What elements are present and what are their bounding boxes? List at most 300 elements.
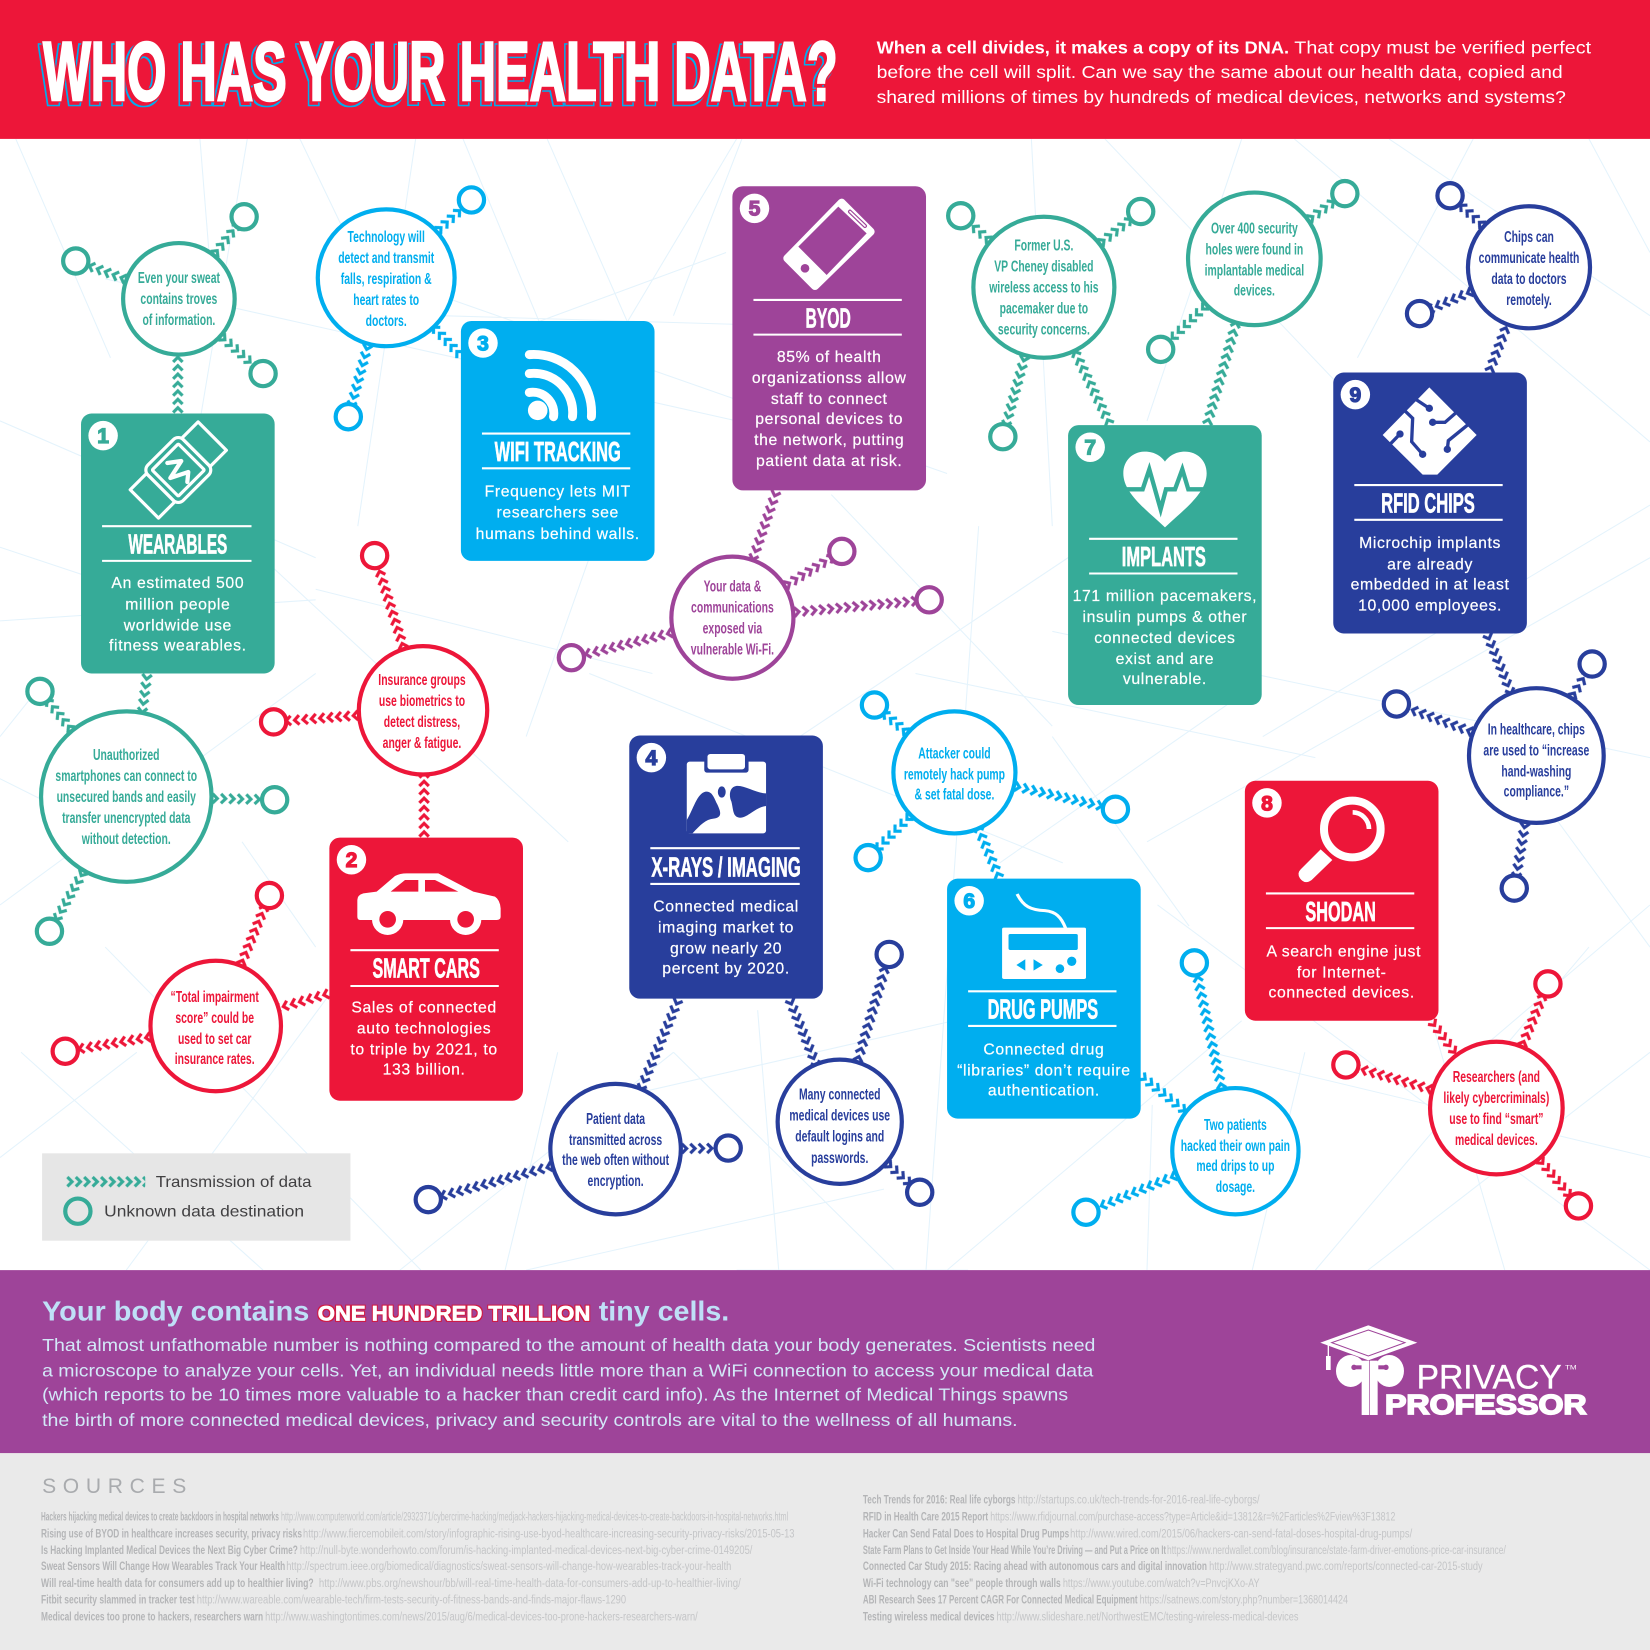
arrow: [582, 626, 675, 661]
cluster: chips callout: [1407, 183, 1590, 375]
arrow: card to callout: [783, 996, 822, 1067]
number 3: 3: [477, 332, 489, 355]
icon: drug pump: [1002, 894, 1086, 979]
callout text: [789, 1085, 890, 1166]
callout text: security concerns.: [998, 320, 1090, 338]
arrow: [1191, 974, 1228, 1091]
node: [1182, 950, 1207, 975]
arrow: [1534, 1155, 1575, 1200]
sources right column: Testing wireless medical devices: [863, 1612, 994, 1624]
callout text: data to doctors: [1491, 270, 1567, 288]
headline: [42, 1296, 729, 1327]
callout text: medical devices.: [1455, 1131, 1538, 1148]
node: [257, 883, 282, 908]
arrow: [209, 223, 241, 259]
node: [1384, 691, 1409, 717]
heading: BYOD: [806, 302, 851, 333]
arrow: card to callout: [418, 774, 430, 838]
sources left column: Medical devices too prone to hackers, researchers warn: [41, 1612, 263, 1624]
callout text: hacked their own pain: [1181, 1137, 1290, 1155]
arrow: [851, 965, 892, 1064]
cluster: default logins callout: [778, 942, 932, 1205]
panel: byod: [732, 186, 926, 490]
callout text: Over 400 security: [1211, 219, 1298, 237]
node: [862, 692, 887, 718]
callout text: VP Cheney disabled: [994, 257, 1094, 275]
headline: tiny cells.: [599, 1296, 729, 1327]
heading: DRUG PUMPS: [988, 994, 1098, 1025]
callout circle: [1172, 1088, 1299, 1214]
arrow: [86, 259, 129, 286]
heading: SMART CARS: [373, 953, 480, 984]
number 9: 9: [1350, 384, 1361, 407]
node: [856, 845, 881, 870]
node: [1566, 1193, 1591, 1219]
node: [948, 203, 973, 228]
callout text: devices.: [1234, 282, 1275, 299]
paragraph: (which reports to be 10 times more valuable to a hacker than credit card info). As the Internet of Medical Things spawns: [42, 1385, 1068, 1405]
callout circle: [318, 209, 455, 346]
arrow: [211, 792, 262, 806]
arrow: [1000, 354, 1031, 426]
callout text: anger & fatigue.: [383, 734, 461, 752]
body text: connected devices.: [1269, 985, 1415, 1002]
arrow: [432, 204, 466, 236]
callout text: smartphones can connect to: [55, 767, 197, 784]
callout text: [562, 1110, 669, 1189]
callout text: [378, 671, 466, 752]
cluster: insurance callout: [261, 543, 487, 838]
node: [1333, 1052, 1359, 1078]
arrow: [1096, 1169, 1179, 1213]
arrow: [346, 342, 374, 406]
node: [917, 587, 942, 612]
cluster: wi-fi exposure callout: [559, 488, 942, 679]
headline: Your body contains: [42, 1296, 309, 1327]
body text: authentication.: [988, 1082, 1100, 1099]
callout text: [1181, 1116, 1290, 1196]
node: [559, 645, 584, 670]
arrow: card to callout: [635, 996, 685, 1091]
node: [907, 1180, 932, 1205]
callout circle: [359, 646, 487, 774]
node: [1332, 181, 1357, 206]
callout circle: [1469, 688, 1604, 823]
arrow: card to callout: [136, 673, 154, 713]
node: [250, 361, 276, 386]
arrow: [1096, 214, 1135, 249]
body text: fitness wearables.: [109, 637, 247, 654]
callout text: passwords.: [811, 1149, 868, 1166]
callout text: “Total impairment: [171, 988, 259, 1005]
icon: smartwatch: [127, 418, 230, 522]
callout text: insurance rates.: [175, 1050, 255, 1067]
sources right column: State Farm Plans to Get Inside Your Head While You’re Driving — and Put a Price on It: [863, 1545, 1166, 1557]
arrow: [880, 709, 912, 738]
node: [336, 404, 361, 429]
node: [1407, 301, 1432, 326]
callout circle: [1188, 193, 1321, 325]
sources right column: http://www.wired.com/2015/06/hackers-can-send-fatal-doses-hospital-drug-pumps/: [1070, 1528, 1413, 1540]
arrow: card to callout: [1069, 348, 1116, 428]
callout text: remotely.: [1506, 291, 1552, 309]
callout text: transmitted across: [569, 1131, 662, 1148]
paragraph: the birth of more connected medical devices, privacy and security controls are vital to the wellness of all humans.: [42, 1410, 1018, 1430]
intro text: [877, 38, 1591, 107]
icon: wifi: [528, 354, 592, 420]
panel: implants: [1068, 425, 1262, 705]
arrow: [681, 1142, 716, 1155]
node: [829, 539, 854, 564]
callout text: implantable medical: [1205, 262, 1304, 279]
callout text: are used to “increase: [1483, 741, 1589, 759]
arrow: [216, 331, 258, 370]
node: [459, 187, 484, 213]
node: [1579, 651, 1605, 677]
arrow: card to callout: [1481, 631, 1517, 695]
arrow: card to callout: [172, 355, 184, 414]
cluster: unauthorized callout: [27, 673, 287, 944]
callout text: used to set car: [178, 1030, 251, 1047]
callout text: Many connected: [799, 1085, 881, 1103]
sources left column: [41, 1512, 794, 1624]
intro text: before the cell will split. Can we say the same about our health data, copied and: [877, 62, 1563, 82]
number 5: 5: [749, 198, 761, 221]
callout text: likely cybercriminals): [1443, 1089, 1549, 1106]
arrow: [1516, 993, 1549, 1049]
sources left column: http://spectrum.ieee.org/biomedical/diagnostics/sweat-sensors-will-change-how-wearables-track-your-health: [286, 1561, 731, 1573]
arrow: card to callout: [747, 488, 783, 562]
callout text: score” could be: [175, 1009, 254, 1026]
node: [261, 709, 286, 735]
arrow: [966, 219, 995, 246]
body text: 85% of health: [777, 349, 882, 366]
callout circle: [671, 557, 793, 679]
callout text: In healthcare, chips: [1488, 720, 1585, 738]
sources left column: http://www.fiercemobileit.com/story/infographic-rising-use-byod-healthcare-increasing-security-privacy-risks/2015-05-13: [303, 1528, 794, 1540]
body text: [752, 349, 907, 470]
sources right column: https://www.rfidjournal.com/purchase-access?type=Article&id=13812&r=%2Farticles%2Fview%3F13812: [990, 1512, 1395, 1524]
body text: A search engine just: [1266, 944, 1421, 961]
arrow: [873, 811, 916, 853]
callout text: of information.: [142, 311, 215, 329]
arrow: [50, 867, 90, 923]
panel: rfid chips: [1333, 373, 1527, 633]
heading: IMPLANTS: [1122, 541, 1206, 572]
sources left column: Sweat Sensors Will Change How Wearables Track Your Health: [41, 1561, 285, 1573]
callout text: Former U.S.: [1014, 236, 1073, 254]
sources right column: http://www.strategyand.pwc.com/reports/connected-car-2015-study: [1209, 1561, 1483, 1573]
cluster: technology callout: [318, 187, 484, 429]
callout text: communications: [691, 598, 774, 616]
number 1: 1: [97, 425, 109, 448]
icon: circuit chip: [1383, 387, 1477, 475]
node: [262, 787, 287, 812]
arrow: [235, 905, 270, 968]
body text: “libraries” don’t require: [957, 1062, 1131, 1079]
panel: shodan: [1245, 781, 1438, 1021]
body text: grow nearly 20: [670, 940, 782, 957]
body text: the network, putting: [754, 432, 904, 449]
callout text: unsecured bands and easily: [57, 788, 196, 805]
callout text: Researchers (and: [1453, 1068, 1540, 1085]
sources left column: http://www.computerworld.com/article/2932371/cybercrime-hacking/medjack-hackers-hijacking-medical-devices-to-create-backdoors-in-hospital-networks.html: [281, 1512, 788, 1524]
callout text: without detection.: [81, 830, 171, 847]
body text: 133 billion.: [383, 1061, 466, 1078]
callout text: doctors.: [366, 312, 407, 330]
callout text: encryption.: [588, 1172, 644, 1189]
callout text: [138, 269, 220, 329]
node: [1128, 199, 1153, 224]
callout text: vulnerable Wi-Fi.: [691, 640, 774, 658]
arrow: [372, 566, 410, 651]
arrow: [1356, 1062, 1434, 1096]
number 4: 4: [646, 747, 658, 770]
body text: for Internet-: [1297, 965, 1387, 982]
paragraph: a microscope to analyze your cells. Yet, an individual needs little more than a WiFi connection to access your medical data: [42, 1360, 1093, 1380]
panel: drug pumps: [947, 879, 1141, 1119]
body text: [109, 575, 247, 654]
callout text: use to find “smart”: [1449, 1110, 1543, 1127]
cluster: impairment callout: [53, 883, 331, 1091]
panel: wearables: [81, 414, 275, 673]
callout circle: [973, 217, 1114, 358]
body text: [476, 484, 640, 543]
body text: are already: [1387, 556, 1473, 573]
body text: connected devices: [1094, 630, 1236, 647]
sources right column: http://startups.co.uk/tech-trends-for-2016-real-life-cyborgs/: [1018, 1495, 1260, 1507]
cluster: patient data callout: [416, 996, 741, 1214]
panel: sources: [0, 1453, 1650, 1650]
arrow: [1406, 702, 1475, 738]
arrow: [1510, 821, 1532, 877]
legend arrows: [66, 1175, 145, 1188]
logo: Privacy Professor: TM: [1565, 1364, 1577, 1371]
number 7: 7: [1084, 437, 1096, 460]
callout text: [338, 228, 435, 330]
legend: [42, 1153, 350, 1241]
callout text: heart rates to: [353, 291, 419, 309]
node: [37, 919, 62, 944]
arrow: [286, 709, 360, 727]
intro text: shared millions of times by hundreds of medical devices, networks and systems?: [877, 87, 1566, 107]
sources right column: Connected Car Study 2015: Racing ahead with autonomous cars and digital innovation: [863, 1561, 1207, 1573]
callout text: [1205, 219, 1304, 299]
sources right column: [863, 1495, 1506, 1624]
callout text: [904, 745, 1005, 803]
cluster: researchers callout: [1333, 971, 1591, 1219]
sources right column: RFID in Health Care 2015 Report: [863, 1512, 988, 1524]
body text: Microchip implants: [1359, 535, 1501, 552]
callout circle: [1468, 206, 1590, 328]
node: [1502, 876, 1527, 901]
callout text: [1479, 228, 1579, 309]
callout text: hand-washing: [1501, 762, 1571, 780]
node: [1437, 183, 1463, 208]
callout text: holes were found in: [1205, 240, 1303, 258]
cluster: sweat callout: [63, 204, 276, 414]
panel: smart cars: [329, 838, 523, 1101]
callout text: wireless access to his: [988, 278, 1099, 296]
panel: body cells: [0, 1270, 1650, 1453]
sources right column: https://www.youtube.com/watch?v=PnvcjKXo-AY: [1063, 1578, 1260, 1590]
node: [232, 204, 257, 229]
callout text: [55, 746, 197, 847]
callout text: Two patients: [1204, 1116, 1267, 1134]
arrow: [1012, 780, 1105, 813]
body text: [350, 999, 498, 1078]
body text: Connected medical: [653, 898, 799, 915]
logo: Privacy Professor: [1319, 1325, 1587, 1420]
node: [990, 424, 1015, 449]
arrow: [1566, 671, 1591, 701]
node: [362, 543, 387, 568]
heading: WEARABLES: [128, 529, 227, 560]
callout circle: [123, 243, 235, 355]
body text: humans behind walls.: [476, 526, 640, 543]
callout text: medical devices use: [789, 1107, 890, 1124]
arrow: [793, 595, 917, 619]
sources left column: Will real-time health data for consumers add up to healthier living?: [41, 1578, 314, 1590]
callout text: detect and transmit: [338, 249, 435, 267]
arrow: [882, 1158, 914, 1188]
arrow: [1455, 200, 1488, 231]
sources left column: http://null-byte.wonderhowto.com/forum/is-hacking-implanted-medical-devices-next-big-cyber-crime-0149205/: [300, 1545, 753, 1557]
sources right column: https://satnews.com/story.php?number=1368014424: [1140, 1595, 1348, 1607]
icon: magnifying glass: [1298, 801, 1381, 882]
body text: embedded in at least: [1351, 576, 1510, 593]
callout circle: [41, 711, 212, 882]
callout text: default logins and: [795, 1128, 884, 1145]
body text: [1073, 588, 1257, 688]
arrow: card to callout: [1137, 1071, 1190, 1117]
node: [416, 1187, 441, 1212]
callout text: Even your sweat: [138, 269, 220, 287]
callout circle: [1430, 1042, 1563, 1174]
body text: insulin pumps & other: [1082, 609, 1247, 626]
node: [877, 942, 902, 967]
callout text: [1443, 1068, 1549, 1148]
body text: [1266, 944, 1421, 1002]
sources left column: Fitbit security slammed in tracker test: [41, 1595, 195, 1607]
cluster: attacker callout: [856, 692, 1128, 881]
node: [1103, 797, 1128, 822]
number 6: 6: [963, 890, 975, 913]
cluster: security holes callout: [1148, 181, 1357, 427]
icon: x-ray clipboard: [687, 752, 766, 833]
callout text: Chips can: [1504, 228, 1554, 246]
callout text: communicate health: [1479, 249, 1579, 267]
icon: car: [357, 873, 501, 935]
body text: exist and are: [1116, 651, 1214, 668]
header band: [0, 0, 1650, 139]
body text: Frequency lets MIT: [485, 484, 631, 501]
body text: vulnerable.: [1123, 671, 1207, 688]
paragraph: [42, 1335, 1095, 1430]
arrow: [781, 553, 834, 592]
body text: imaging market to: [658, 919, 794, 936]
callout text: transfer unencrypted data: [62, 809, 191, 826]
body text: percent by 2020.: [662, 960, 790, 977]
sources right column: Tech Trends for 2016: Real life cyborgs: [863, 1495, 1015, 1507]
heading: RFID CHIPS: [1381, 487, 1475, 518]
sources left column: http://www.wareable.com/wearable-tech/firm-tests-security-of-fitness-bands-and-finds-major-flaws-1290: [197, 1595, 626, 1607]
sources right column: ABI Research Sees 17 Percent CAGR For Connected Medical Equipment: [863, 1595, 1138, 1607]
arrow: [439, 1160, 554, 1202]
callout text: Unauthorized: [93, 746, 160, 763]
legend ring: [65, 1199, 90, 1224]
sources left column: Hackers hijacking medical devices to create backdoors in hospital networks: [41, 1512, 279, 1524]
icon: phone: [787, 203, 871, 286]
callout text: exposed via: [703, 619, 763, 637]
arrow: card to callout: [277, 987, 331, 1014]
body text: million people: [125, 596, 230, 613]
callout text: the web often without: [562, 1151, 669, 1168]
callout text: falls, respiration &: [341, 270, 432, 288]
paragraph: That almost unfathomable number is nothing compared to the amount of health data your body generates. Scientists need: [42, 1335, 1095, 1355]
arrow: card to callout: [972, 826, 1005, 881]
heading: SHODAN: [1305, 896, 1376, 927]
cluster: pain med callout: [1073, 950, 1299, 1225]
node: [1148, 337, 1173, 362]
callout text: Attacker could: [918, 745, 991, 762]
body text: to triple by 2021, to: [350, 1041, 498, 1058]
node: [63, 248, 88, 274]
callout circle: [893, 711, 1015, 833]
callout text: [988, 236, 1099, 338]
body text: staff to connect: [771, 391, 888, 408]
callout circle: [550, 1084, 681, 1214]
cluster: Cheney callout: [948, 199, 1153, 449]
callout text: Your data &: [704, 577, 761, 595]
body text: An estimated 500: [111, 575, 244, 592]
callout text: Technology will: [348, 228, 425, 246]
body text: [1351, 535, 1510, 614]
panel: x-rays / imaging: [629, 736, 823, 999]
sources heading: SOURCES: [42, 1475, 186, 1498]
body text: [957, 1041, 1131, 1099]
cluster: hand-washing callout: [1384, 631, 1605, 901]
legend label: Transmission of data: [156, 1174, 312, 1191]
arrow: card to callout: [1483, 322, 1513, 375]
arrow: [1304, 196, 1338, 225]
body text: worldwide use: [123, 617, 232, 634]
heading: X-RAYS / IMAGING: [651, 852, 801, 883]
callout text: remotely hack pump: [904, 766, 1005, 783]
body text: patient data at risk.: [756, 453, 902, 470]
callout text: Patient data: [586, 1110, 646, 1127]
sources left column: http://www.washingtontimes.com/news/2015/aug/6/medical-devices-too-prone-hackers-researchers-warn/: [265, 1612, 698, 1624]
body text: 10,000 employees.: [1358, 597, 1502, 614]
arrow: card to callout: [429, 323, 465, 360]
callout text: [1483, 720, 1589, 800]
callout text: pacemaker due to: [1000, 299, 1088, 317]
body text: researchers see: [496, 505, 619, 522]
callout text: [691, 577, 774, 658]
sources right column: https://www.nerdwallet.com/blog/insurance/state-farm-driver-emotions-price-car-insurance/: [1167, 1545, 1506, 1557]
sources right column: Hacker Can Send Fatal Does to Hospital Drug Pumps: [863, 1528, 1069, 1540]
callout text: [171, 988, 259, 1067]
intro text: That copy must be verified perfect: [1294, 38, 1591, 58]
node: [27, 679, 53, 704]
body text: organizationss allow: [752, 370, 907, 387]
callout circle: [778, 1060, 902, 1184]
heading: WIFI TRACKING: [495, 436, 621, 467]
callout text: dosage.: [1216, 1178, 1255, 1196]
arrow: [1165, 300, 1211, 345]
callout text: use biometrics to: [379, 692, 465, 710]
arrow: card to callout: [1426, 1017, 1461, 1058]
